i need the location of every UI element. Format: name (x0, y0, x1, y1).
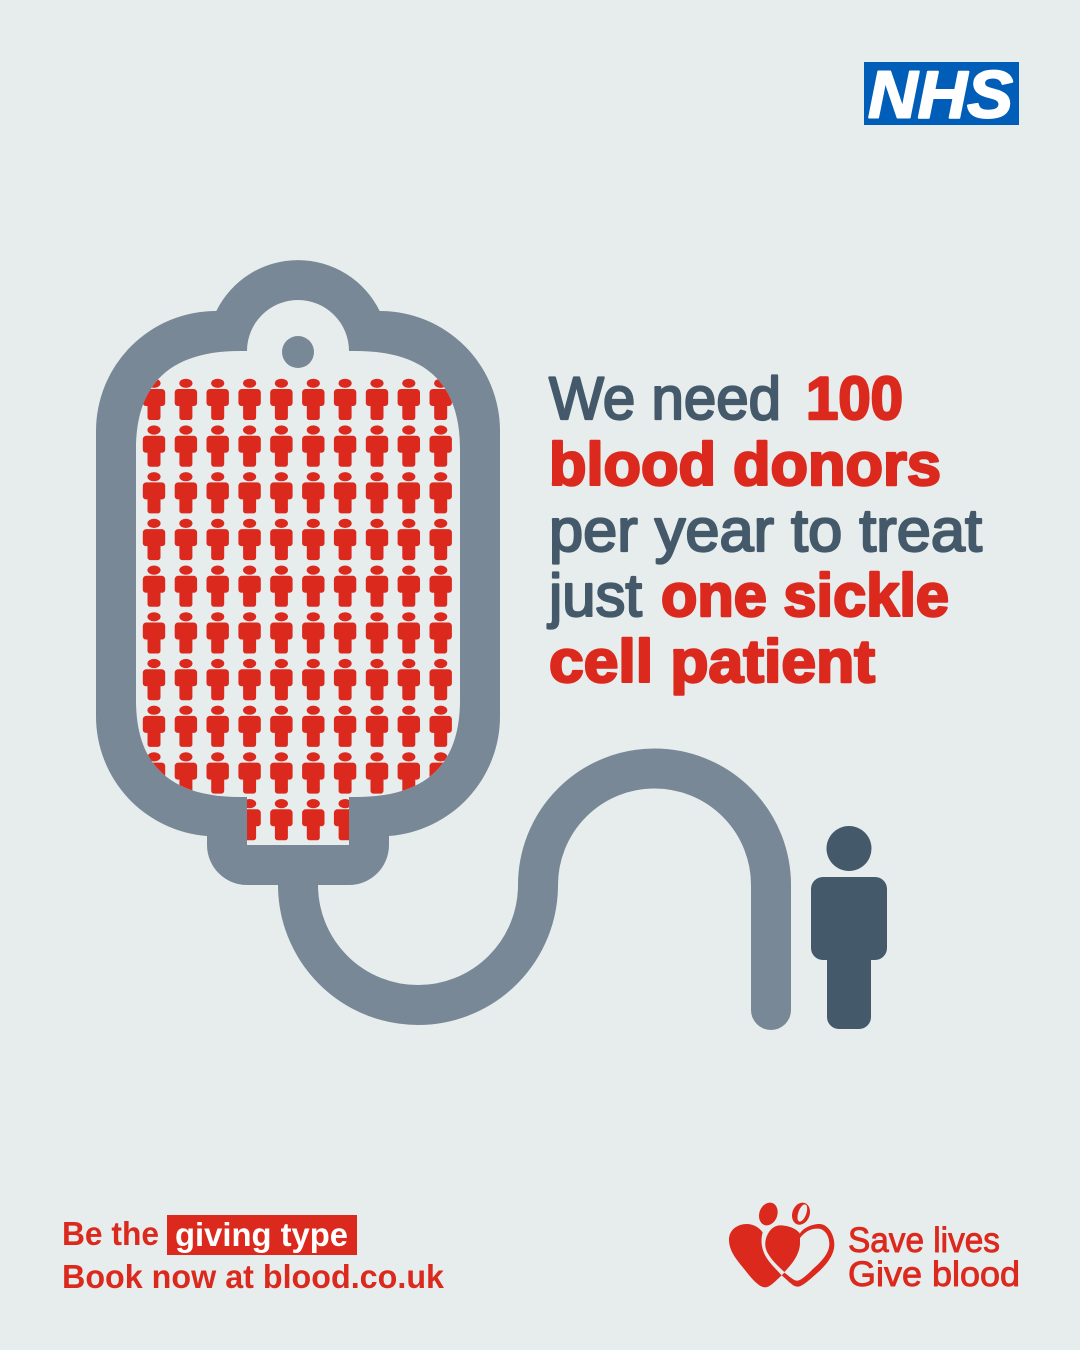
headline text: 100 (806, 365, 903, 432)
Give Blood logo text: Save lives (848, 1221, 1000, 1260)
Give Blood logo hearts (729, 1200, 834, 1287)
headline text: just (547, 562, 642, 629)
headline text: We need (549, 365, 781, 432)
headline text (547, 365, 982, 695)
headline text: blood donors (549, 431, 941, 498)
icon: blood bag outline (96, 260, 500, 885)
Give Blood logo text (848, 1221, 1020, 1294)
headline text: per year to treat (549, 497, 982, 564)
icon: patient figure (811, 826, 887, 1029)
call to action: giving type (175, 1216, 348, 1253)
pictogram: 100 red donors inside bag (143, 379, 452, 840)
Give Blood logo text: Give blood (848, 1255, 1020, 1294)
icon: blood bag tube (298, 768, 771, 1010)
call to action: Book now at blood.co.uk (62, 1258, 445, 1295)
headline text: one sickle (661, 562, 949, 629)
call to action (62, 1215, 445, 1295)
NHS logo: NHS (868, 58, 1013, 132)
call to action: Be the (62, 1215, 159, 1252)
headline text: cell patient (549, 628, 875, 695)
